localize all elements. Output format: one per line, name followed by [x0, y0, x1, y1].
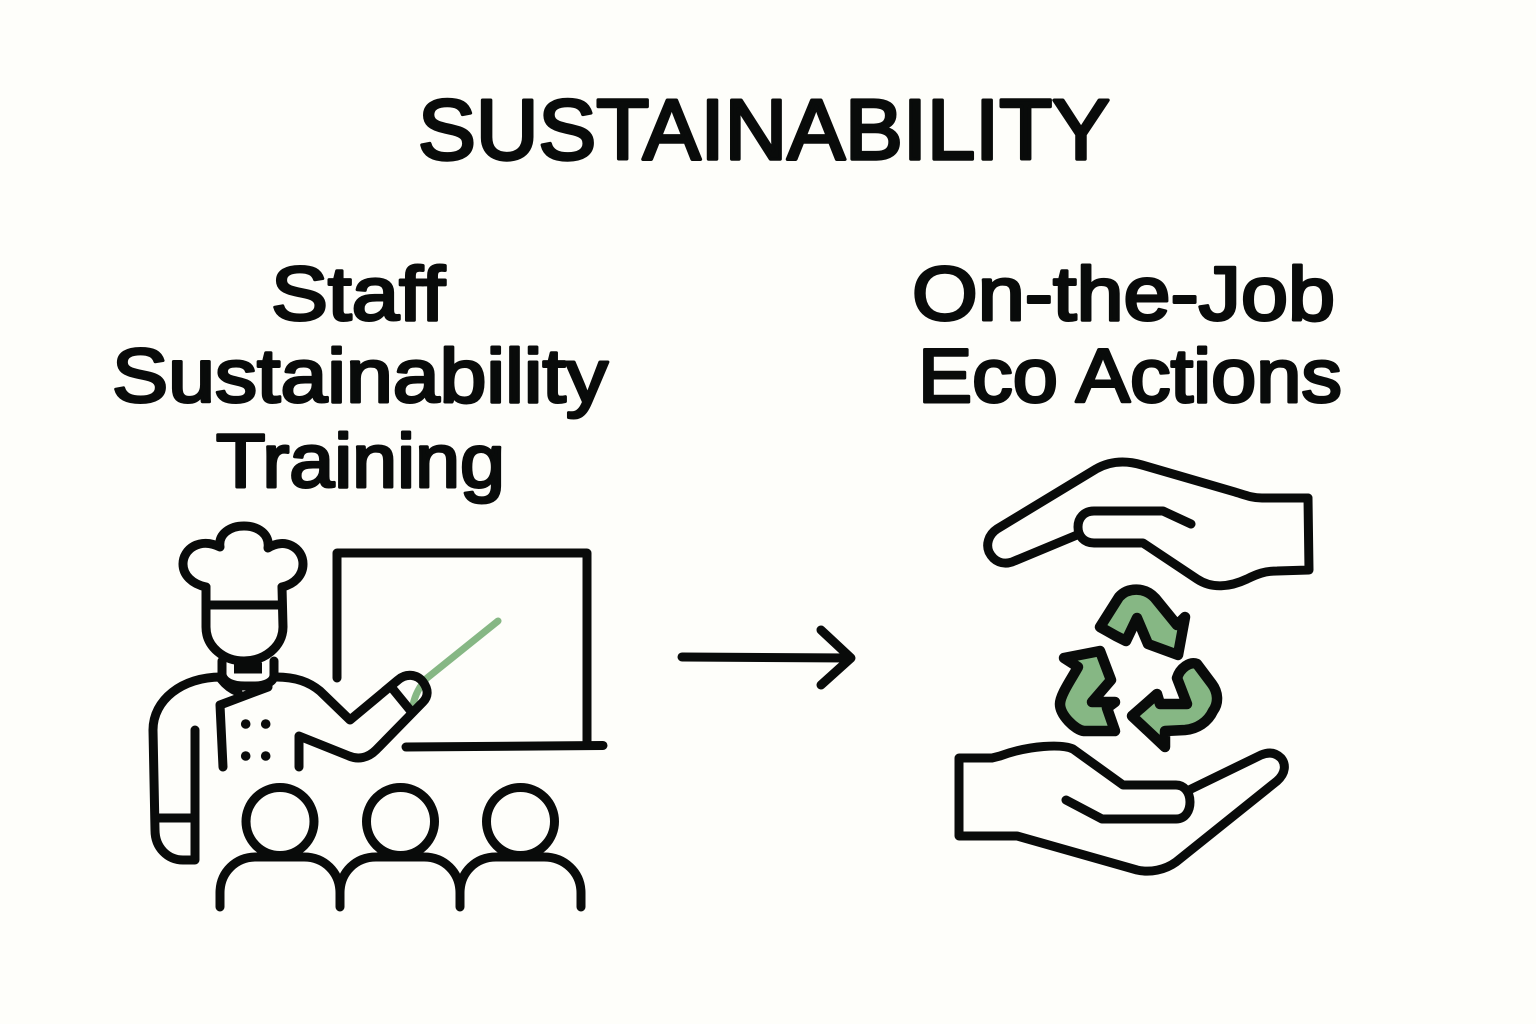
pointer stick: [413, 621, 498, 705]
heading: staff sustainability training: Training: [216, 419, 505, 504]
heading: staff sustainability training: Staff: [271, 252, 446, 337]
heading: staff sustainability training: Sustainability: [112, 334, 608, 419]
panel: on-the-job eco actions: [912, 252, 1342, 871]
presentation board: [337, 553, 603, 747]
chef body and arm: [153, 675, 427, 860]
heading: on-the-job eco actions: On-the-Job: [912, 252, 1335, 337]
chef collar: [222, 661, 274, 686]
bottom hand: [959, 746, 1284, 871]
icon: hands protecting recycling symbol: [959, 462, 1309, 871]
icon: chef presenting at a board to an audience: [153, 526, 603, 907]
arrow: [682, 630, 851, 685]
panel: staff sustainability training: [112, 252, 608, 907]
chef hat and head: [183, 526, 303, 661]
heading: on-the-job eco actions: Eco Actions: [918, 334, 1342, 419]
heading: on-the-job eco actions: [912, 252, 1342, 419]
heading: staff sustainability training: [112, 252, 608, 504]
top hand: [988, 462, 1309, 586]
audience: [220, 788, 581, 907]
chef buttons: [241, 719, 271, 761]
recycling symbol: [1060, 590, 1217, 747]
title: SUSTAINABILITY: [418, 83, 1110, 178]
